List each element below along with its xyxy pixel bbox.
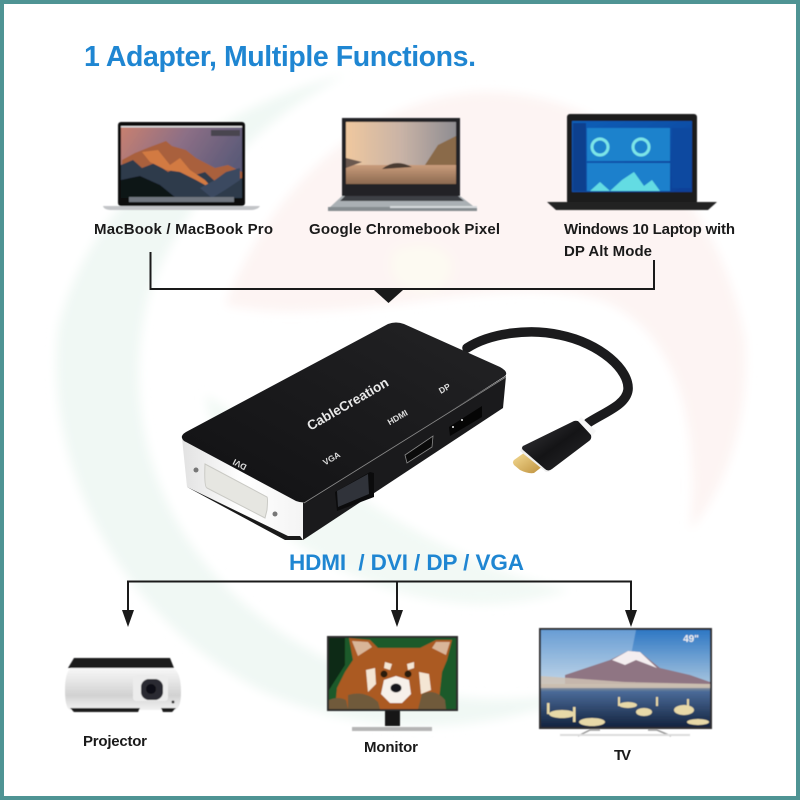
label: projector: Projector: [83, 733, 147, 750]
background swirl logo: [56, 75, 746, 726]
label: Windows laptop: Windows 10 Laptop with: [564, 221, 735, 238]
icon: projector: [65, 658, 181, 712]
icon: Chromebook laptop: [328, 118, 477, 211]
label: Windows laptop: [564, 221, 735, 260]
icon: monitor: [327, 636, 458, 731]
label: monitor: Monitor: [364, 739, 418, 756]
icon: TV: 49": [683, 634, 699, 645]
label: MacBook: MacBook / MacBook Pro: [94, 221, 273, 238]
black top face: [182, 322, 506, 502]
icon: MacBook laptop: [103, 122, 260, 210]
adapter: multiport hub: DP: [437, 381, 452, 396]
title: 1 Adapter, Multiple Functions.: [84, 41, 476, 73]
tree connector with arrows to outputs: [122, 582, 637, 627]
white side face: [182, 438, 303, 540]
USB-C plug: [513, 417, 596, 473]
port: DVI: [205, 464, 268, 518]
adapter labels: CableCreation: [304, 375, 391, 433]
adapter: multiport hub: DVI: [231, 457, 248, 472]
cable: [467, 332, 628, 423]
icon: TV: [539, 628, 712, 736]
adapter: multiport hub: HDMI: [386, 408, 409, 427]
label: Chromebook: Google Chromebook Pixel: [309, 221, 500, 238]
adapter: multiport hub: VGA: [321, 449, 342, 467]
heading: output formats: HDMI / DVI / DP / VGA: [289, 550, 524, 575]
black right side face: [303, 376, 506, 540]
port: VGA: [335, 472, 374, 511]
label: Windows laptop: DP Alt Mode: [564, 243, 652, 260]
label: TV: TV: [614, 747, 631, 764]
icon: Windows laptop: [547, 114, 717, 210]
bracket connector arrow: sources to adapter: [150, 252, 654, 303]
port: DP: [449, 406, 482, 436]
adapter: multiport hub: [182, 322, 628, 540]
port: HDMI: [405, 436, 433, 463]
